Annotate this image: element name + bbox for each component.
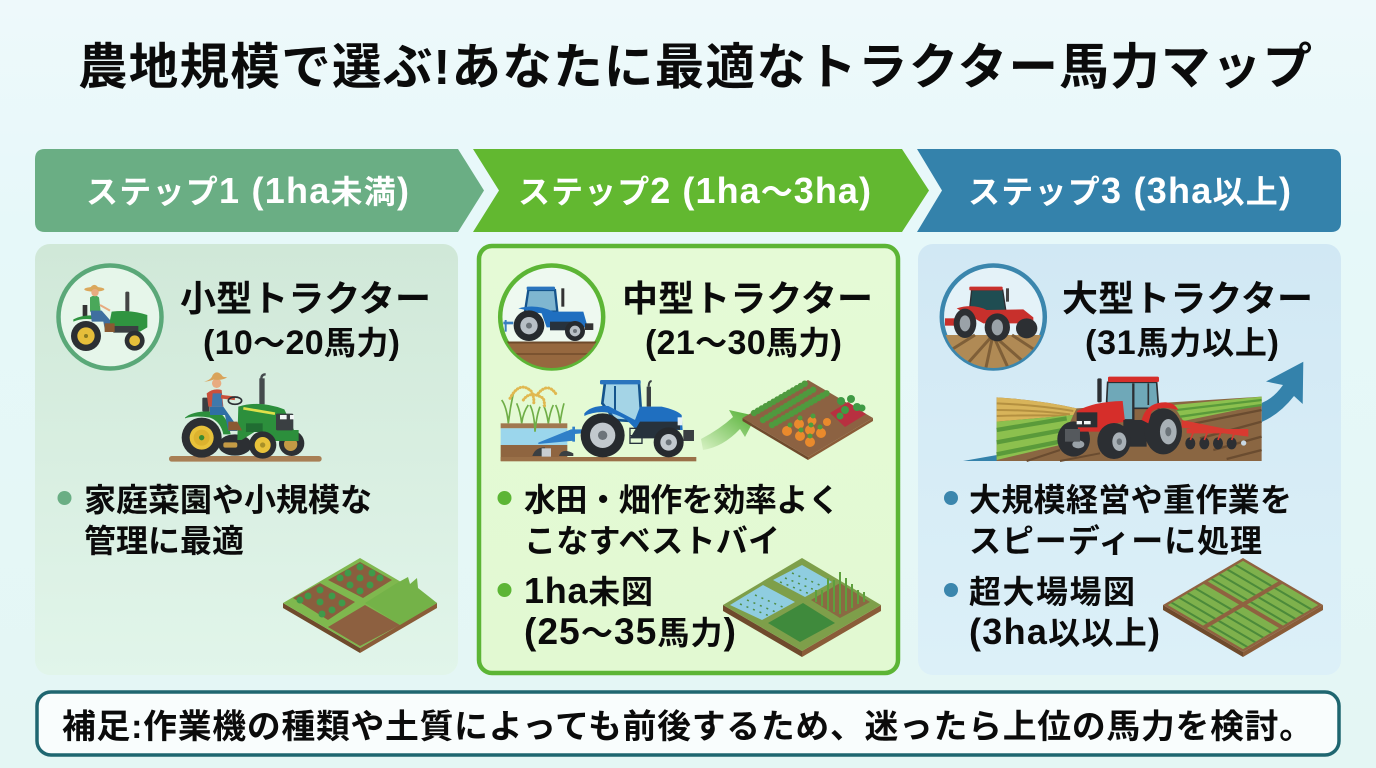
bullet text: 管理に最適 bbox=[84, 523, 244, 559]
bullet dot bbox=[498, 491, 512, 505]
title: 農地規模で選ぶ!あなたに最適なトラクター馬力マップ bbox=[78, 40, 1312, 95]
illustration: rice paddy with blue tractor bbox=[501, 380, 696, 461]
bullet text bbox=[524, 570, 736, 652]
bullet text bbox=[969, 574, 1160, 652]
icon: large tractor badge bbox=[935, 266, 1050, 372]
illustration: small farm plot bbox=[283, 558, 437, 653]
bullet text: 家庭菜園や小規模な bbox=[84, 482, 372, 518]
bullet text: スピーディーに処理 bbox=[969, 523, 1262, 559]
heading: 中型トラクター bbox=[622, 278, 873, 319]
step banner 2 bbox=[473, 149, 929, 232]
step banner 3: ステップ3 (3ha以上) bbox=[968, 170, 1291, 211]
bullet text: 超大場場図 bbox=[969, 574, 1135, 610]
bullet dot bbox=[58, 491, 72, 505]
footer note: 補足:作業機の種類や土質によっても前後するため、迷ったら上位の馬力を検討。 bbox=[62, 708, 1313, 746]
power range: (21〜30馬力) bbox=[645, 324, 842, 362]
icon: small tractor badge bbox=[58, 266, 162, 368]
arrow: green to vegetable field bbox=[701, 410, 756, 450]
step banner 1 bbox=[35, 149, 484, 232]
panel: small tractor bbox=[35, 244, 458, 675]
panel: large tractor bbox=[918, 244, 1341, 675]
illustration: vegetable field bbox=[742, 380, 873, 460]
bullet text: (25〜35馬力) bbox=[524, 611, 736, 652]
heading: 大型トラクター bbox=[1062, 278, 1313, 319]
bullet text: 水田・畑作を効率よく bbox=[524, 482, 840, 518]
bullet text: こなすベストバイ bbox=[524, 523, 780, 559]
arrow: growth bbox=[963, 362, 1303, 461]
illustration: red tractor in field bbox=[997, 377, 1262, 461]
power range: (10〜20馬力) bbox=[203, 324, 400, 362]
icon: medium tractor badge bbox=[495, 266, 610, 372]
bullet dot bbox=[944, 491, 958, 505]
bullet text: (3ha以以上) bbox=[969, 611, 1160, 652]
bullet text: 大規模経営や重作業を bbox=[969, 482, 1292, 518]
illustration: paddy field plot bbox=[723, 558, 881, 657]
illustration: large field plot bbox=[1163, 558, 1323, 657]
heading: 小型トラクター bbox=[180, 278, 431, 319]
bullet text bbox=[524, 482, 840, 559]
bullet dot bbox=[944, 583, 958, 597]
step banner 2: ステップ2 (1ha〜3ha) bbox=[518, 170, 871, 211]
power range: (31馬力以上) bbox=[1085, 324, 1279, 362]
step banner 3 bbox=[917, 149, 1341, 232]
bullet text bbox=[969, 482, 1292, 559]
step banner 1: ステップ1 (1ha未満) bbox=[86, 170, 409, 211]
footer note bbox=[37, 692, 1339, 755]
bullet text bbox=[84, 482, 372, 559]
illustration: green tractor bbox=[169, 372, 322, 462]
bullet text: 1ha未図 bbox=[524, 570, 653, 611]
bullet dot bbox=[498, 583, 512, 597]
panel: medium tractor (highlighted) bbox=[479, 246, 898, 673]
